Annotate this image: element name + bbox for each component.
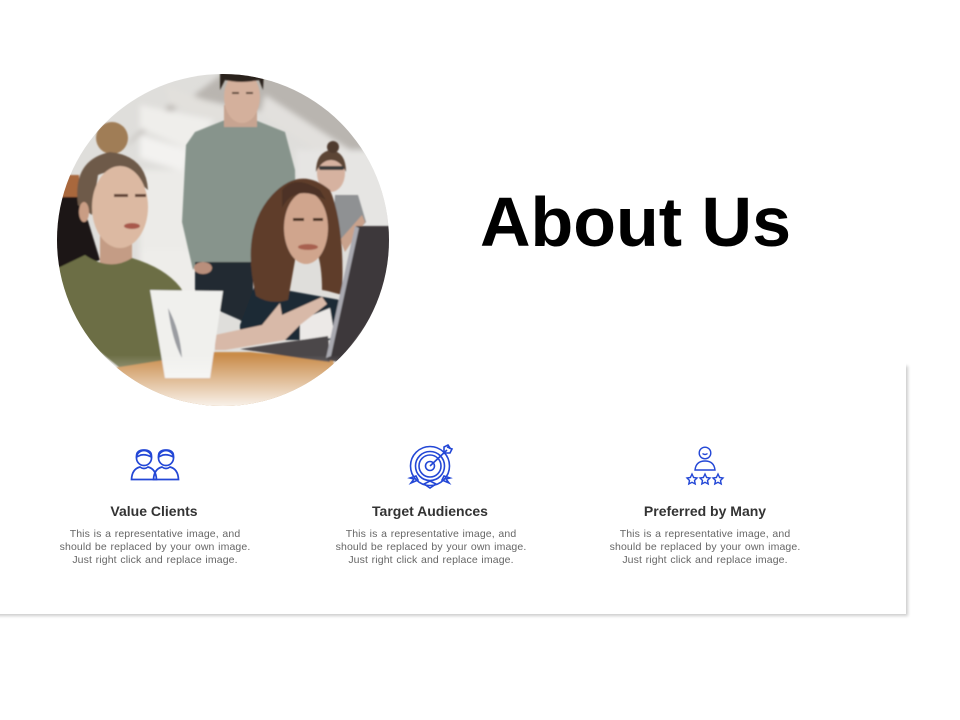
heading: Value Clients: Value Clients bbox=[110, 503, 198, 519]
text: Target Audiences description: Just right click and replace image. bbox=[348, 554, 514, 566]
text: Value Clients description: Just right click and replace image. bbox=[72, 554, 238, 566]
back woman bbox=[334, 194, 366, 239]
panel: white card with shadow bbox=[0, 362, 906, 614]
text: Target Audiences description: should be replaced by your own image. bbox=[336, 541, 526, 553]
heading: Target Audiences: Target Audiences bbox=[372, 503, 488, 519]
hand and arm bbox=[215, 297, 327, 350]
right woman: jacket bbox=[240, 285, 340, 340]
text: Target Audiences description bbox=[336, 528, 526, 566]
white cup bbox=[150, 290, 223, 378]
laptop bbox=[240, 336, 330, 362]
text: Preferred by Many description: should be replaced by your own image. bbox=[610, 541, 800, 553]
left woman bbox=[96, 122, 128, 154]
text: Preferred by Many description bbox=[610, 528, 800, 566]
icon: target with arrows bbox=[407, 444, 454, 489]
photo: team around a laptop in a circle bbox=[57, 74, 389, 406]
text: Preferred by Many description: This is a representative image, and bbox=[620, 528, 790, 540]
left dark background figure bbox=[57, 196, 101, 268]
text: Value Clients description: should be replaced by your own image. bbox=[60, 541, 250, 553]
title: About Us bbox=[480, 183, 791, 261]
table bbox=[116, 351, 334, 406]
text: Value Clients description bbox=[60, 528, 250, 566]
text: Preferred by Many description: Just right click and replace image. bbox=[622, 554, 788, 566]
icon: two people bbox=[130, 449, 180, 480]
icon: person with three stars bbox=[686, 446, 724, 486]
text: Value Clients description: This is a representative image, and bbox=[70, 528, 240, 540]
standing man bbox=[182, 120, 296, 270]
text: Target Audiences description: This is a representative image, and bbox=[346, 528, 516, 540]
heading: Preferred by Many: Preferred by Many bbox=[644, 503, 766, 519]
